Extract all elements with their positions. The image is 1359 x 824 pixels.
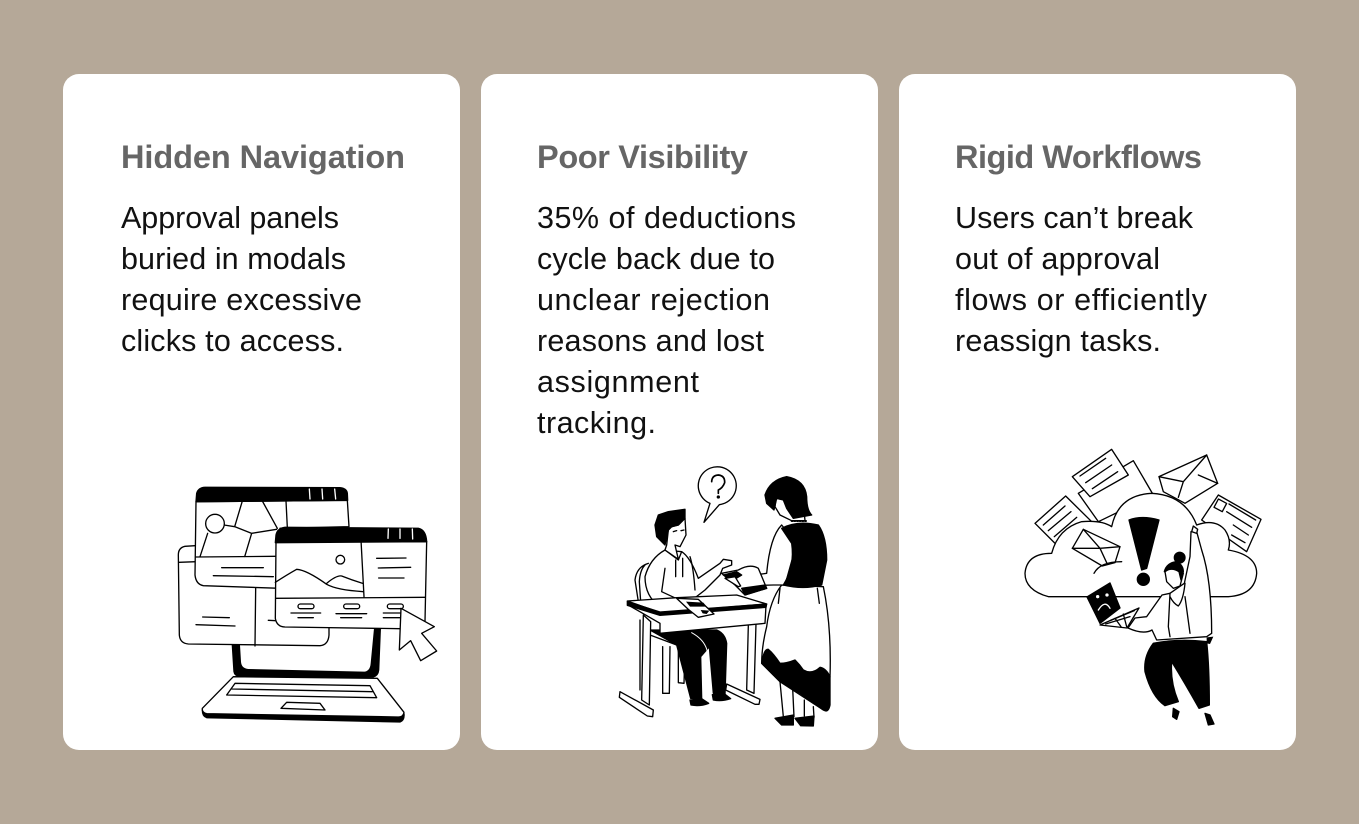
speech bubble with question mark [698,467,736,522]
text block: Rigid Workflows [955,139,1208,358]
front window [275,527,427,629]
shoes [690,633,731,706]
text block: Rigid Workflows: Rigid Workflows [955,139,1202,175]
envelope in cloud [1072,529,1122,573]
text block: Hidden Navigation: require excessive [121,283,362,317]
teacher [737,477,830,726]
panel: Hidden Navigation [63,74,460,750]
student [645,509,732,611]
text block: Poor Visibility: cycle back due to [537,242,775,276]
text block: Poor Visibility: 35% of deductions [537,201,796,235]
icon: laptop with sad face [1087,583,1139,628]
open book in hands [722,566,767,595]
desk [627,595,767,633]
text block: Hidden Navigation: clicks to access. [121,324,344,358]
text block: Poor Visibility: assignment [537,365,700,399]
text block: Hidden Navigation: Hidden Navigation [121,139,405,175]
text block: Poor Visibility: unclear rejection [537,283,770,317]
documents and envelopes behind the cloud [1035,449,1261,552]
text block: Rigid Workflows: Users can’t break [955,201,1194,235]
woman trousers and shoes [1145,637,1214,725]
illustration: student asking teacher a question at a desk [618,466,831,727]
text block: Poor Visibility: tracking. [537,406,656,440]
text block: Rigid Workflows: reassign tasks. [955,324,1161,358]
monitor frame [232,628,381,678]
illustration: overwhelmed woman with cloud, documents and laptop [1024,448,1262,726]
text block: Poor Visibility [537,139,796,440]
icon: cursor arrow [399,608,437,661]
desk legs [619,615,760,717]
laptop base [202,677,404,722]
text block: Rigid Workflows: out of approval [955,242,1160,276]
text block: Hidden Navigation [121,139,405,358]
icon: exclamation mark [1129,518,1159,585]
text block: Poor Visibility: reasons and lost [537,324,765,358]
panel: Poor Visibility [481,74,878,750]
student legs [650,630,727,698]
text block: Poor Visibility: Poor Visibility [537,139,748,175]
illustration: browser windows over a laptop with cursor [178,486,438,723]
chair [635,563,685,693]
cloud [1025,493,1257,597]
panel: Rigid Workflows [899,74,1296,750]
back window [178,546,329,646]
text block: Rigid Workflows: flows or efficiently [955,283,1208,317]
woman [1128,526,1212,640]
text block: Hidden Navigation: buried in modals [121,242,346,276]
text block: Hidden Navigation: Approval panels [121,201,339,235]
top window [195,487,349,588]
